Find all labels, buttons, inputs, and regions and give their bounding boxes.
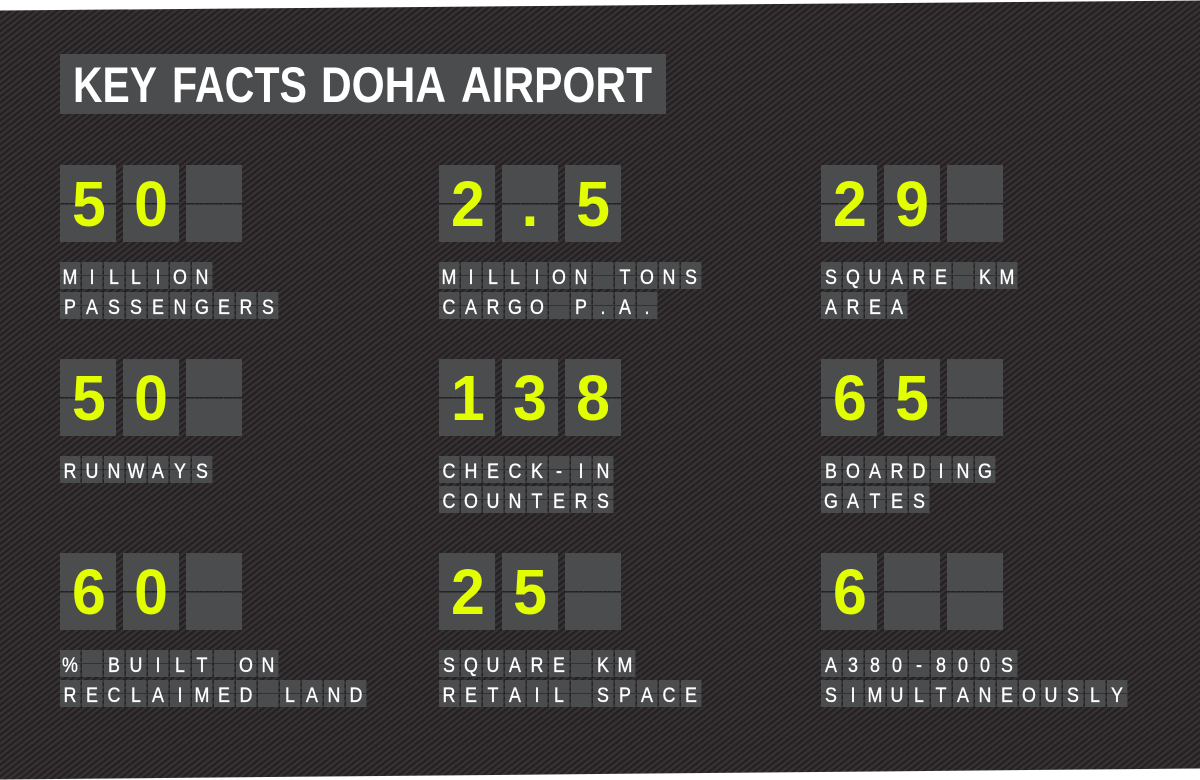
- label: % built on reclaimed land: R: [64, 684, 76, 707]
- stat number: 29: 2: [833, 168, 867, 240]
- label: check-in counters: K: [531, 460, 543, 483]
- label: million tons cargo p.a.: N: [575, 266, 587, 289]
- label: million tons cargo p.a.: G: [508, 296, 522, 319]
- label: a380-800s simultaneously: 3: [848, 654, 858, 677]
- label: % built on reclaimed land: L: [285, 684, 295, 707]
- label: million tons cargo p.a.: T: [620, 266, 630, 289]
- label: square km retail space: L: [554, 684, 564, 707]
- label: square km retail space: P: [619, 684, 631, 707]
- label: % built on reclaimed land: B: [108, 654, 120, 677]
- stat number: 138: 8: [576, 362, 610, 434]
- label: million tons cargo p.a.: I: [535, 266, 539, 289]
- label: boarding gates: S: [913, 490, 925, 513]
- label: boarding gates: G: [824, 490, 838, 513]
- label: boarding gates: B: [825, 460, 837, 483]
- stat number: 50 runways: 0: [134, 362, 168, 434]
- label: % built on reclaimed land: N: [262, 654, 274, 677]
- label: million passengers: L: [109, 266, 119, 289]
- label: square km retail space: S: [443, 654, 455, 677]
- label: check-in counters: [439, 456, 614, 513]
- label: boarding gates: O: [846, 460, 860, 483]
- label: boarding gates: R: [891, 460, 903, 483]
- title: KEY: [73, 57, 157, 113]
- stat number: 60: 6: [72, 556, 106, 628]
- label: % built on reclaimed land: L: [175, 654, 185, 677]
- stat number: 6: [821, 553, 1003, 630]
- stat number: 25: 5: [513, 556, 547, 628]
- stat number: 60: [60, 553, 242, 630]
- label: million passengers: I: [156, 266, 160, 289]
- label: a380-800s simultaneously: M: [868, 684, 882, 707]
- label: check-in counters: N: [509, 490, 521, 513]
- label: a380-800s simultaneously: I: [851, 684, 855, 707]
- label: square km retail space: A: [509, 684, 521, 707]
- label: % built on reclaimed land: I: [178, 684, 182, 707]
- label: million tons cargo p.a.: P: [575, 296, 587, 319]
- label: a380-800s simultaneously: L: [1090, 684, 1100, 707]
- label: a380-800s simultaneously: L: [914, 684, 924, 707]
- label: boarding gates: N: [957, 460, 969, 483]
- label: square km area: A: [891, 266, 903, 289]
- label: a380-800s simultaneously: S: [825, 684, 837, 707]
- stat number: 29: 9: [895, 168, 929, 240]
- label: square km retail space: T: [488, 684, 498, 707]
- label: a380-800s simultaneously: [821, 650, 1128, 707]
- label: a380-800s simultaneously: Y: [1111, 684, 1123, 707]
- label: % built on reclaimed land: T: [197, 654, 207, 677]
- label: runways: U: [86, 460, 98, 483]
- label: check-in counters: C: [443, 460, 455, 483]
- label: million tons cargo p.a.: N: [663, 266, 675, 289]
- label: million tons cargo p.a.: [439, 262, 702, 319]
- label: check-in counters: C: [443, 490, 455, 513]
- stat number: 25: 2: [451, 556, 485, 628]
- label: square km area: M: [1000, 266, 1014, 289]
- label: million passengers: I: [90, 266, 94, 289]
- label: % built on reclaimed land: A: [306, 684, 318, 707]
- label: million passengers: A: [86, 296, 98, 319]
- label: square km area: E: [869, 296, 881, 319]
- label: million passengers: L: [131, 266, 141, 289]
- stat number: 138: 3: [513, 362, 547, 434]
- label: a380-800s simultaneously: 0: [958, 654, 968, 677]
- label: million tons cargo p.a.: L: [510, 266, 520, 289]
- label: % built on reclaimed land: I: [156, 654, 160, 677]
- label: million passengers: [60, 262, 278, 319]
- label: million passengers: S: [108, 296, 120, 319]
- label: check-in counters: S: [597, 490, 609, 513]
- label: million tons cargo p.a.: C: [443, 296, 455, 319]
- label: million passengers: P: [64, 296, 76, 319]
- stat number: 29: [821, 165, 1003, 242]
- label: % built on reclaimed land: A: [152, 684, 164, 707]
- stat number: 2.5: 2: [451, 168, 485, 240]
- label: % built on reclaimed land: %: [62, 654, 78, 677]
- label: % built on reclaimed land: E: [86, 684, 98, 707]
- stat number: 65: [821, 359, 1003, 436]
- label: square km area: K: [979, 266, 991, 289]
- label: square km area: R: [913, 266, 925, 289]
- label: boarding gates: E: [891, 490, 903, 513]
- label: square km area: S: [825, 266, 837, 289]
- label: % built on reclaimed land: U: [130, 654, 142, 677]
- label: a380-800s simultaneously: 8: [870, 654, 880, 677]
- stat number: 50: [60, 165, 242, 242]
- label: million passengers: G: [195, 296, 209, 319]
- label: million tons cargo p.a.: I: [469, 266, 473, 289]
- label: million tons cargo p.a.: O: [530, 296, 544, 319]
- label: a380-800s simultaneously: N: [979, 684, 991, 707]
- label: a380-800s simultaneously: 0: [892, 654, 902, 677]
- stat number: 138: 1: [451, 362, 485, 434]
- label: runways: N: [108, 460, 120, 483]
- label: square km retail space: E: [553, 654, 565, 677]
- label: % built on reclaimed land: M: [195, 684, 209, 707]
- label: a380-800s simultaneously: S: [1001, 654, 1013, 677]
- stat number: 138: [439, 359, 621, 436]
- label: runways: R: [64, 460, 76, 483]
- label: square km area: [821, 262, 1018, 319]
- label: square km retail space: M: [618, 654, 632, 677]
- label: million tons cargo p.a.: .: [645, 296, 649, 319]
- label: million passengers: N: [196, 266, 208, 289]
- label: million tons cargo p.a.: .: [601, 296, 605, 319]
- label: runways: W: [128, 460, 144, 483]
- title: [60, 54, 666, 114]
- label: boarding gates: A: [847, 490, 859, 513]
- label: square km retail space: A: [641, 684, 653, 707]
- label: square km area: A: [825, 296, 837, 319]
- stat number: 65: 6: [833, 362, 867, 434]
- stat number: 6: 6: [833, 556, 867, 628]
- label: million tons cargo p.a.: M: [442, 266, 456, 289]
- label: million passengers: E: [218, 296, 230, 319]
- label: check-in counters: -: [556, 460, 562, 483]
- label: million tons cargo p.a.: R: [487, 296, 499, 319]
- label: a380-800s simultaneously: 8: [936, 654, 946, 677]
- label: square km retail space: [439, 650, 702, 707]
- label: runways: Y: [174, 460, 186, 483]
- label: check-in counters: E: [553, 490, 565, 513]
- label: million passengers: N: [174, 296, 186, 319]
- label: a380-800s simultaneously: A: [957, 684, 969, 707]
- label: square km area: A: [891, 296, 903, 319]
- stat number: 50: 5: [72, 168, 106, 240]
- label: million passengers: R: [240, 296, 252, 319]
- label: check-in counters: T: [532, 490, 542, 513]
- label: a380-800s simultaneously: -: [916, 654, 922, 677]
- label: million passengers: O: [173, 266, 187, 289]
- stat number: 2.5: .: [522, 168, 538, 240]
- title: FACTS: [172, 57, 307, 113]
- title: DOHA: [321, 57, 446, 113]
- label: % built on reclaimed land: O: [239, 654, 253, 677]
- label: a380-800s simultaneously: E: [1001, 684, 1013, 707]
- label: square km retail space: E: [465, 684, 477, 707]
- label: a380-800s simultaneously: A: [825, 654, 837, 677]
- label: square km area: R: [847, 296, 859, 319]
- stat number: 65: 5: [895, 362, 929, 434]
- label: square km retail space: A: [509, 654, 521, 677]
- label: % built on reclaimed land: L: [131, 684, 141, 707]
- stat number: 50 runways: 5: [72, 362, 106, 434]
- label: million tons cargo p.a.: S: [685, 266, 697, 289]
- label: million passengers: M: [63, 266, 77, 289]
- label: million tons cargo p.a.: L: [488, 266, 498, 289]
- label: check-in counters: H: [465, 460, 477, 483]
- stat number: 25: [439, 553, 621, 630]
- stat number: 2.5: [439, 165, 621, 242]
- label: a380-800s simultaneously: O: [1022, 684, 1036, 707]
- label: million passengers: E: [152, 296, 164, 319]
- label: boarding gates: T: [870, 490, 880, 513]
- stat number: 60: 0: [134, 556, 168, 628]
- label: a380-800s simultaneously: U: [891, 684, 903, 707]
- label: square km retail space: I: [535, 684, 539, 707]
- label: % built on reclaimed land: D: [350, 684, 362, 707]
- label: a380-800s simultaneously: T: [936, 684, 946, 707]
- label: runways: [60, 456, 212, 483]
- label: a380-800s simultaneously: 0: [980, 654, 990, 677]
- label: million passengers: S: [130, 296, 142, 319]
- label: million passengers: S: [262, 296, 274, 319]
- label: runways: S: [196, 460, 208, 483]
- label: % built on reclaimed land: D: [240, 684, 252, 707]
- label: a380-800s simultaneously: U: [1045, 684, 1057, 707]
- label: % built on reclaimed land: [60, 650, 366, 707]
- label: boarding gates: D: [913, 460, 925, 483]
- label: million tons cargo p.a.: A: [465, 296, 477, 319]
- label: million tons cargo p.a.: O: [552, 266, 566, 289]
- label: square km area: U: [869, 266, 881, 289]
- label: square km retail space: E: [685, 684, 697, 707]
- label: square km retail space: S: [597, 684, 609, 707]
- label: square km retail space: C: [663, 684, 675, 707]
- label: square km area: Q: [846, 266, 860, 289]
- label: square km retail space: R: [443, 684, 455, 707]
- label: runways: A: [152, 460, 164, 483]
- label: % built on reclaimed land: E: [218, 684, 230, 707]
- label: square km area: E: [935, 266, 947, 289]
- label: boarding gates: [821, 456, 996, 513]
- label: square km retail space: K: [597, 654, 609, 677]
- label: a380-800s simultaneously: S: [1067, 684, 1079, 707]
- label: check-in counters: R: [575, 490, 587, 513]
- label: check-in counters: U: [487, 490, 499, 513]
- label: boarding gates: I: [939, 460, 943, 483]
- label: square km retail space: Q: [464, 654, 478, 677]
- label: check-in counters: N: [597, 460, 609, 483]
- label: check-in counters: C: [509, 460, 521, 483]
- label: boarding gates: G: [978, 460, 992, 483]
- label: boarding gates: A: [869, 460, 881, 483]
- stat number: 50 runways: [60, 359, 242, 436]
- label: % built on reclaimed land: C: [108, 684, 120, 707]
- label: check-in counters: O: [464, 490, 478, 513]
- label: check-in counters: E: [487, 460, 499, 483]
- label: check-in counters: I: [579, 460, 583, 483]
- label: square km retail space: U: [487, 654, 499, 677]
- label: square km retail space: R: [531, 654, 543, 677]
- stat number: 2.5: 5: [576, 168, 610, 240]
- label: million tons cargo p.a.: O: [640, 266, 654, 289]
- label: % built on reclaimed land: N: [328, 684, 340, 707]
- stat number: 50: 0: [134, 168, 168, 240]
- label: million tons cargo p.a.: A: [619, 296, 631, 319]
